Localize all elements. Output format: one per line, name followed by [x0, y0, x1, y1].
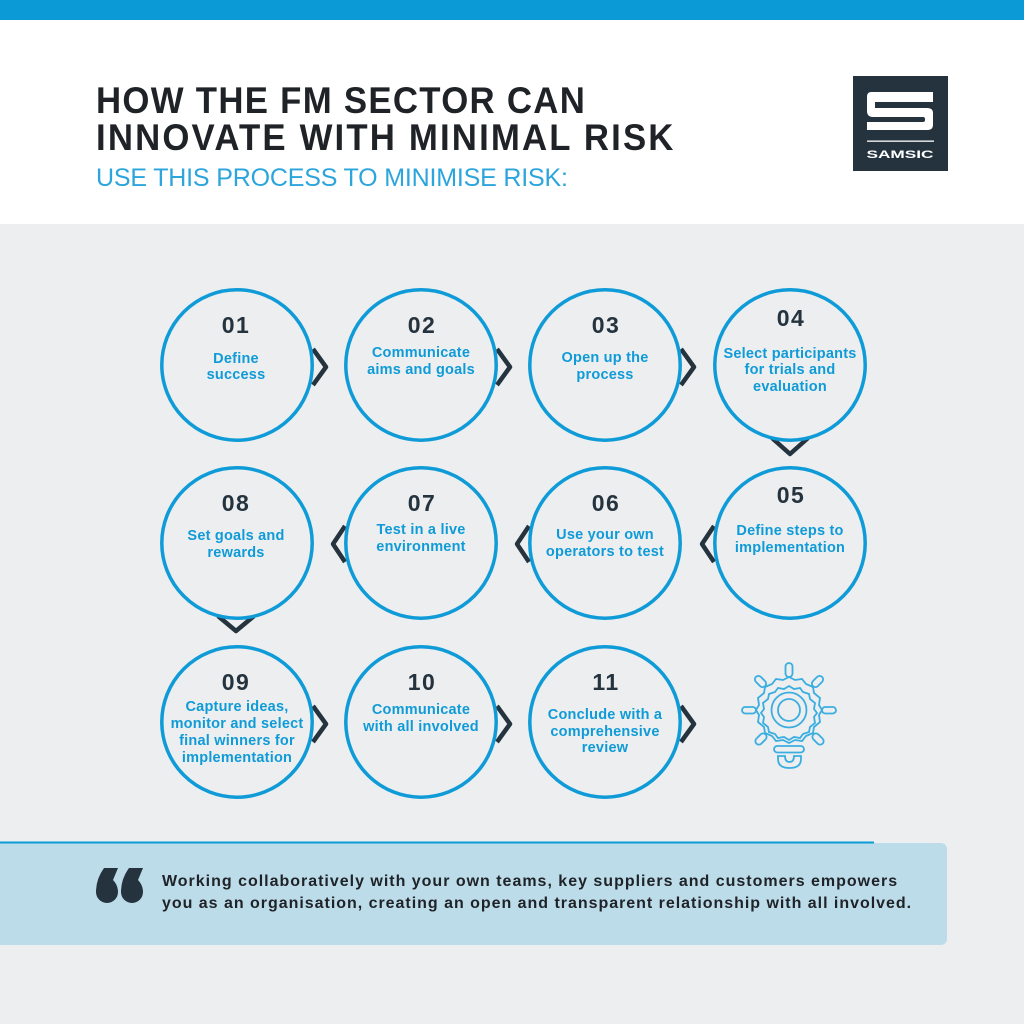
step 11: Conclude with a [548, 707, 663, 723]
step 09 [162, 647, 312, 797]
step 06: 06 [592, 490, 620, 516]
step 05: 05 [777, 482, 805, 508]
quote text [162, 873, 912, 912]
step 10: Communicate [372, 702, 470, 718]
step 02: 02 [408, 312, 436, 338]
step 04: 04 [777, 305, 805, 331]
step 06: operators to test [546, 544, 664, 560]
title: INNOVATE WITH MINIMAL RISK [96, 117, 676, 158]
quote text: Working collaboratively with your own teams, key suppliers and customers empowers [162, 873, 898, 890]
step 11: 11 [592, 669, 620, 695]
step 08: rewards [207, 545, 265, 561]
step 11: comprehensive [550, 724, 660, 740]
step 07 [346, 468, 496, 618]
step 07: 07 [408, 490, 436, 516]
step 01: 01 [222, 312, 250, 338]
step 09: monitor and select [171, 716, 303, 732]
icon: lightbulb with gear [742, 663, 836, 768]
step 03: 03 [592, 312, 620, 338]
step 10 [346, 647, 496, 797]
step 01: Define [213, 351, 259, 367]
step 04: evaluation [753, 379, 827, 395]
step 03: Open up the [562, 350, 648, 366]
step 04: for trials and [745, 362, 835, 378]
step 04 [715, 290, 865, 440]
step 04: Select participants [723, 346, 857, 362]
step 09: Capture ideas, [185, 699, 289, 715]
step 05: Define steps to [736, 523, 844, 539]
step 01: success [207, 367, 265, 383]
step 01 [162, 290, 312, 440]
title [96, 80, 676, 158]
quote band [0, 842, 947, 945]
step 11: review [582, 740, 629, 756]
step 05 [715, 468, 865, 618]
step 02: aims and goals [367, 362, 475, 378]
quote text: you as an organisation, creating an open and transparent relationship with all involved. [162, 895, 912, 912]
step 07: environment [376, 539, 466, 555]
step 02 [346, 290, 496, 440]
icon: quotation marks [96, 868, 143, 903]
arrows between steps [218, 349, 808, 742]
subtitle: USE THIS PROCESS TO MINIMISE RISK: [96, 164, 568, 192]
step 09: final winners for [179, 733, 295, 749]
step 03 [530, 290, 680, 440]
step 07: Test in a live [376, 522, 466, 538]
step 11 [530, 647, 680, 797]
step 06 [530, 468, 680, 618]
logo: Samsic: SAMSIC [866, 149, 934, 161]
step 05: implementation [735, 540, 845, 556]
step 10: 10 [408, 669, 436, 695]
title: HOW THE FM SECTOR CAN [96, 80, 586, 121]
step 08 [162, 468, 312, 618]
logo: Samsic [853, 76, 948, 171]
step 10: with all involved [362, 719, 479, 735]
step 08: Set goals and [187, 528, 285, 544]
step 03: process [576, 367, 634, 383]
step 08: 08 [222, 490, 250, 516]
step 09: implementation [182, 750, 292, 766]
step 02: Communicate [372, 345, 470, 361]
top bar [0, 0, 1024, 20]
step 06: Use your own [556, 527, 654, 543]
step 09: 09 [222, 669, 250, 695]
